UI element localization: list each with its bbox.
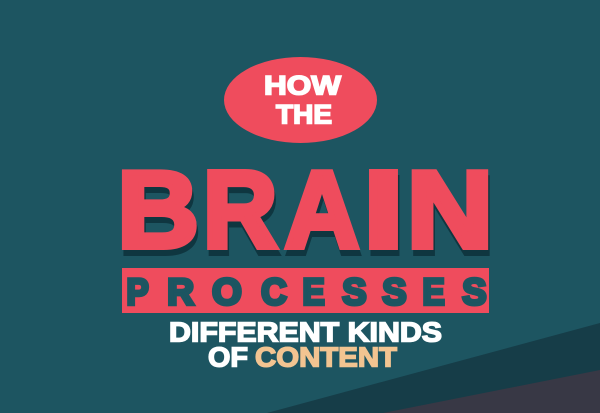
banner: processes: S xyxy=(462,271,487,312)
heading: brain: N xyxy=(407,149,493,271)
heading: brain: A xyxy=(286,155,360,277)
background band: charcoal xyxy=(383,370,600,413)
heading: brain: R xyxy=(205,155,279,277)
banner: processes: P xyxy=(126,271,149,312)
subtitle: different kinds of content: OF xyxy=(208,342,248,372)
heading: brain: I xyxy=(365,155,405,277)
heading: brain xyxy=(118,149,494,277)
heading: brain: A xyxy=(285,149,359,271)
banner: processes: S xyxy=(342,271,367,312)
subtitle: different kinds of content: CONTENT xyxy=(255,342,397,372)
subtitle: different kinds of content xyxy=(169,316,442,372)
heading: brain: N xyxy=(408,155,494,277)
banner: processes xyxy=(122,268,489,313)
banner: processes: E xyxy=(422,271,445,312)
banner: processes: R xyxy=(167,271,194,312)
subtitle: different kinds of content: DIFFERENT KINDS xyxy=(169,316,442,348)
badge: how the: HOW xyxy=(264,70,341,100)
banner: processes: S xyxy=(382,271,407,312)
badge: how the: THE xyxy=(276,100,332,130)
heading: brain: I xyxy=(363,149,404,271)
banner: processes: O xyxy=(212,271,242,312)
heading: brain: R xyxy=(203,149,277,271)
heading: brain: B xyxy=(118,149,199,271)
heading: brain: B xyxy=(119,155,200,277)
background band: dark teal xyxy=(267,323,600,413)
badge: how the xyxy=(224,57,377,143)
banner: processes: E xyxy=(302,271,325,312)
banner: processes: C xyxy=(261,271,287,312)
